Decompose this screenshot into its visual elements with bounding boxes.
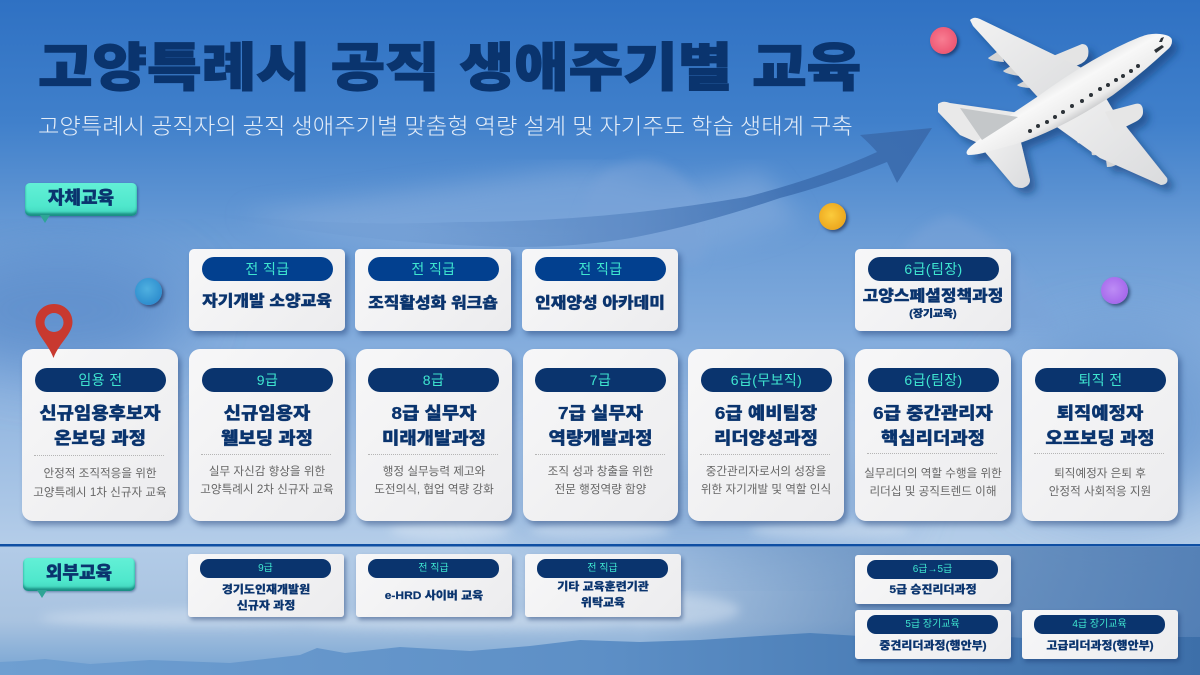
title: 고양특례시 공직 생애주기별 교육 xyxy=(38,40,861,98)
course name: 위탁교육 xyxy=(581,596,625,608)
course description: 고양특례시 1차 신규자 교육 xyxy=(33,486,167,499)
course name: 온보딩 과정 xyxy=(54,428,146,448)
course name: 기타 교육훈련기관 xyxy=(557,581,649,593)
course name: 6급 예비팀장 xyxy=(715,403,817,423)
pill: grade: 4급 장기교육 xyxy=(1072,619,1127,630)
external card: 경기도인재개발원 xyxy=(188,554,344,617)
course name xyxy=(557,580,649,608)
pill: grade: 퇴직 전 xyxy=(1078,372,1123,388)
course name xyxy=(714,403,818,448)
course description: 행정 실무능력 제고와 xyxy=(383,465,485,478)
course name: 8급 실무자 xyxy=(391,403,477,423)
pill: grade xyxy=(35,368,166,392)
course name: 인재양성 아카데미 xyxy=(535,295,665,312)
course name: 웰보딩 과정 xyxy=(221,428,313,448)
course name xyxy=(222,584,310,612)
course name: 중견리더과정(행안부) xyxy=(879,640,987,652)
card: 9급 xyxy=(189,349,345,521)
badge: 외부교육: 외부교육 xyxy=(46,563,112,583)
pill: grade: 임용 전 xyxy=(78,372,123,388)
pill: grade: 7급 xyxy=(590,372,611,388)
course description: 리더십 및 공직트렌드 이해 xyxy=(870,485,996,498)
pill: grade xyxy=(535,368,666,392)
pill: grade xyxy=(200,559,331,578)
pill: grade xyxy=(867,615,998,634)
icon: blue ball xyxy=(135,278,162,305)
course name: 경기도인재개발원 xyxy=(222,584,310,596)
course name: 5급 승진리더과정 xyxy=(889,584,977,596)
icon: yellow ball xyxy=(819,203,846,230)
course name xyxy=(221,403,313,448)
card: 6급(팀장) xyxy=(855,349,1011,521)
course name: 핵심리더과정 xyxy=(881,428,985,448)
external card: e-HRD xyxy=(356,554,512,617)
pill: grade xyxy=(1034,615,1165,634)
icon: red location pin xyxy=(36,304,72,358)
pill: grade xyxy=(1035,368,1166,392)
course description: 고양특례시 2차 신규자 교육 xyxy=(200,483,334,496)
course name: e-HRD 사이버 교육 xyxy=(385,590,483,602)
external card: 기타 교육훈련기관 xyxy=(525,554,681,617)
course name: 고급리더과정(행안부) xyxy=(1046,640,1154,652)
course name: 고양스페셜정책과정 xyxy=(863,288,1003,305)
course description: 실무리더의 역할 수행을 위한 xyxy=(864,467,1002,480)
course description: 전문 행정역량 함양 xyxy=(555,483,646,496)
pill: grade: 전 직급 xyxy=(578,261,623,277)
course description: 중간관리자로서의 성장을 xyxy=(706,465,826,478)
pill: grade: 6급(팀장) xyxy=(904,372,963,388)
course name: 신규임용후보자 xyxy=(39,403,161,423)
icon: pink ball xyxy=(930,27,957,54)
pill: grade xyxy=(368,559,499,578)
pill: grade xyxy=(867,560,998,579)
badge: 자체교육 xyxy=(25,183,137,216)
course name: 오프보딩 과정 xyxy=(1045,428,1155,448)
pill: grade: 전 직급 xyxy=(411,261,456,277)
external card: 중견리더과정 xyxy=(855,610,1011,659)
card: 8급 xyxy=(356,349,512,521)
course name xyxy=(1045,403,1155,448)
course name xyxy=(549,403,652,448)
course name: 퇴직예정자 xyxy=(1057,403,1143,423)
course description: 위한 자기개발 및 역할 인식 xyxy=(701,483,831,496)
card: 6급(팀장) 고양스페셜정책과정 xyxy=(855,249,1011,331)
course description xyxy=(535,454,665,496)
pill: grade xyxy=(202,368,333,392)
pill: grade xyxy=(868,257,999,281)
pill: grade xyxy=(701,368,832,392)
course note: (장기교육) xyxy=(909,309,957,320)
course description xyxy=(700,454,831,496)
course description xyxy=(200,454,334,496)
course name: 리더양성과정 xyxy=(714,428,818,448)
course name xyxy=(39,403,161,448)
badge: 자체교육: 자체교육 xyxy=(48,188,114,208)
mountain range xyxy=(0,632,1200,675)
course description xyxy=(1034,453,1164,498)
card: 퇴직 전 xyxy=(1022,349,1178,521)
course description xyxy=(368,454,498,496)
pill: grade xyxy=(202,257,333,281)
pill: grade xyxy=(868,368,999,392)
course name: 역량개발과정 xyxy=(549,428,652,448)
pill: grade xyxy=(535,257,666,281)
card: 전 직급 조직활성화 워크숍 xyxy=(355,249,511,331)
external card: 5급 승진리더과정 xyxy=(855,555,1011,604)
subtitle: 고양특례시 공직자의 공직 생애주기별 맞춤형 역량 설계 및 자기주도 학습 생태계 구축 xyxy=(38,114,853,139)
pill: grade: 5급 장기교육 xyxy=(905,619,960,630)
course name: 7급 실무자 xyxy=(558,403,643,423)
pill: grade xyxy=(537,559,668,578)
external card: 고급리더과정 xyxy=(1022,610,1178,659)
course name: 신규자 과정 xyxy=(237,600,295,612)
course description: 퇴직예정자 은퇴 후 xyxy=(1054,467,1146,480)
course name: 조직활성화 워크숍 xyxy=(368,295,498,312)
pill: grade: 6급(팀장) xyxy=(904,261,963,277)
pill: grade: 8급 xyxy=(423,372,444,388)
course description: 안정적 조직적응을 위한 xyxy=(43,467,157,480)
pill: grade: 6급→5급 xyxy=(913,564,952,575)
course name: 미래개발과정 xyxy=(382,428,486,448)
card: 임용 전 xyxy=(22,349,178,521)
course description: 실무 자신감 향상을 위한 xyxy=(209,465,325,478)
pill: grade xyxy=(368,368,499,392)
pill: grade: 9급 xyxy=(258,563,273,574)
card: 6급(무보직) xyxy=(688,349,844,521)
pill: grade xyxy=(368,257,499,281)
badge: 외부교육 xyxy=(23,558,135,591)
course description xyxy=(864,453,1002,498)
course name xyxy=(382,403,486,448)
course description: 조직 성과 창출을 위한 xyxy=(548,465,653,478)
card: 전 직급 자기개발 소양교육 xyxy=(189,249,345,331)
icon: airplane xyxy=(938,18,1181,198)
pill: grade: 전 직급 xyxy=(245,261,290,277)
card: 7급 xyxy=(523,349,678,521)
course name: 자기개발 소양교육 xyxy=(202,293,332,310)
icon: purple ball xyxy=(1101,277,1128,304)
pill: grade: 전 직급 xyxy=(587,563,618,574)
course description: 도전의식, 협업 역량 강화 xyxy=(374,483,494,496)
course description: 안정적 사회적응 지원 xyxy=(1049,485,1151,498)
course name: 6급 중간관리자 xyxy=(873,403,993,423)
course name: 신규임용자 xyxy=(224,403,310,423)
pill: grade: 9급 xyxy=(257,372,278,388)
course name xyxy=(873,403,993,448)
pill: grade: 6급(무보직) xyxy=(731,372,802,388)
pill: grade: 전 직급 xyxy=(418,563,449,574)
course description xyxy=(33,455,167,499)
card: 전 직급 인재양성 아카데미 xyxy=(522,249,678,331)
